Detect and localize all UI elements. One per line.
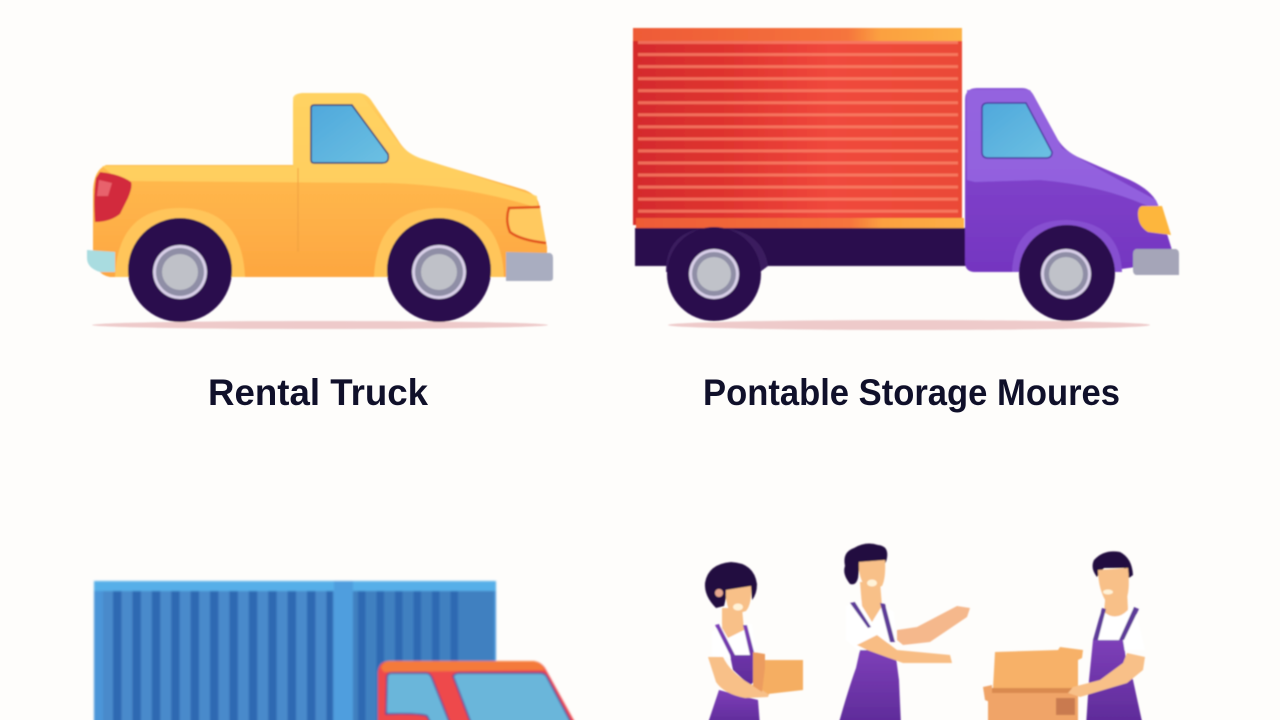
small truck cab bbox=[378, 661, 577, 720]
truck chassis bbox=[635, 228, 967, 266]
arm bbox=[708, 657, 770, 698]
pickup tail light bbox=[94, 172, 132, 222]
shirt bbox=[712, 624, 756, 658]
panel: portable storage box truck illustration bbox=[633, 28, 1179, 330]
cab window bbox=[982, 103, 1052, 158]
hair bbox=[844, 544, 887, 584]
cab rear window bbox=[386, 673, 451, 720]
shirt bbox=[1095, 608, 1145, 650]
face bbox=[726, 586, 751, 613]
cargo box ribs bbox=[638, 41, 958, 218]
pickup window bbox=[311, 105, 388, 163]
pickup rear bumper bbox=[87, 250, 115, 272]
cab hood highlight bbox=[967, 90, 1160, 212]
pickup ground shadow bbox=[92, 321, 548, 329]
mover one with box bbox=[705, 562, 803, 720]
hair bbox=[1093, 551, 1133, 578]
neck bbox=[1104, 590, 1128, 617]
box seam bbox=[990, 688, 1078, 693]
hair bbox=[705, 562, 757, 608]
hand on box bbox=[753, 652, 765, 692]
pickup hood highlight bbox=[102, 93, 538, 208]
pickup front bumper bbox=[506, 252, 553, 281]
container top strip bbox=[94, 581, 496, 591]
smile bbox=[1103, 590, 1113, 594]
heading: rental truck: Rental Truck bbox=[208, 372, 428, 413]
overalls lower bbox=[707, 690, 760, 720]
front wheel arch bbox=[1012, 220, 1122, 272]
far arm bbox=[897, 606, 970, 645]
container side ribs bbox=[358, 590, 468, 720]
panel: rental truck pickup illustration bbox=[87, 93, 553, 329]
cab front window bbox=[453, 673, 573, 720]
container divider post bbox=[334, 581, 353, 720]
overalls body bbox=[838, 650, 901, 720]
neck bbox=[860, 582, 882, 622]
left hand bbox=[983, 685, 992, 703]
cargo box top strip bbox=[633, 28, 962, 41]
container body bbox=[94, 581, 496, 720]
overalls straps and bib bbox=[715, 624, 755, 686]
arm bbox=[1068, 653, 1145, 697]
container side panel bbox=[353, 588, 494, 720]
cab front bumper bbox=[1133, 249, 1179, 275]
pickup door seam bbox=[297, 168, 299, 252]
lower box bbox=[988, 693, 1078, 720]
pickup front wheel bbox=[387, 218, 491, 322]
neck bbox=[722, 608, 744, 638]
smile bbox=[733, 604, 743, 610]
smile bbox=[867, 580, 877, 586]
overalls straps bbox=[1093, 607, 1139, 640]
pickup wheel arches bbox=[115, 208, 504, 277]
overalls straps bbox=[850, 602, 895, 642]
truck cab bbox=[965, 88, 1172, 272]
face bbox=[859, 560, 885, 588]
cargo box bottom strip bbox=[636, 218, 964, 228]
upper box bbox=[993, 647, 1083, 690]
mover three with boxes bbox=[983, 551, 1145, 720]
box truck ground shadow bbox=[668, 320, 1150, 330]
cargo box bbox=[633, 28, 962, 225]
shirt bbox=[846, 600, 896, 652]
mover two gesturing bbox=[838, 544, 970, 720]
box bbox=[762, 660, 803, 694]
pickup tail light glint bbox=[97, 180, 112, 196]
face bbox=[1098, 568, 1129, 606]
ear bbox=[715, 589, 723, 597]
container front panel bbox=[103, 591, 333, 720]
near arm bbox=[857, 635, 952, 663]
cab orange roof strip bbox=[381, 661, 545, 672]
heading: portable storage: Pontable Storage Moures bbox=[703, 372, 1120, 413]
box label bbox=[1056, 698, 1075, 715]
rear wheel bbox=[666, 227, 768, 321]
front wheel bbox=[1019, 225, 1115, 321]
container front ribs bbox=[113, 591, 333, 720]
cab headlight bbox=[1138, 206, 1171, 235]
panel: movers illustration bbox=[705, 544, 1145, 720]
pickup headlight bbox=[507, 207, 546, 243]
pickup rear wheel bbox=[128, 218, 232, 322]
pickup body bbox=[93, 93, 547, 277]
panel: container truck illustration bbox=[94, 581, 577, 720]
overalls body bbox=[1086, 640, 1143, 720]
